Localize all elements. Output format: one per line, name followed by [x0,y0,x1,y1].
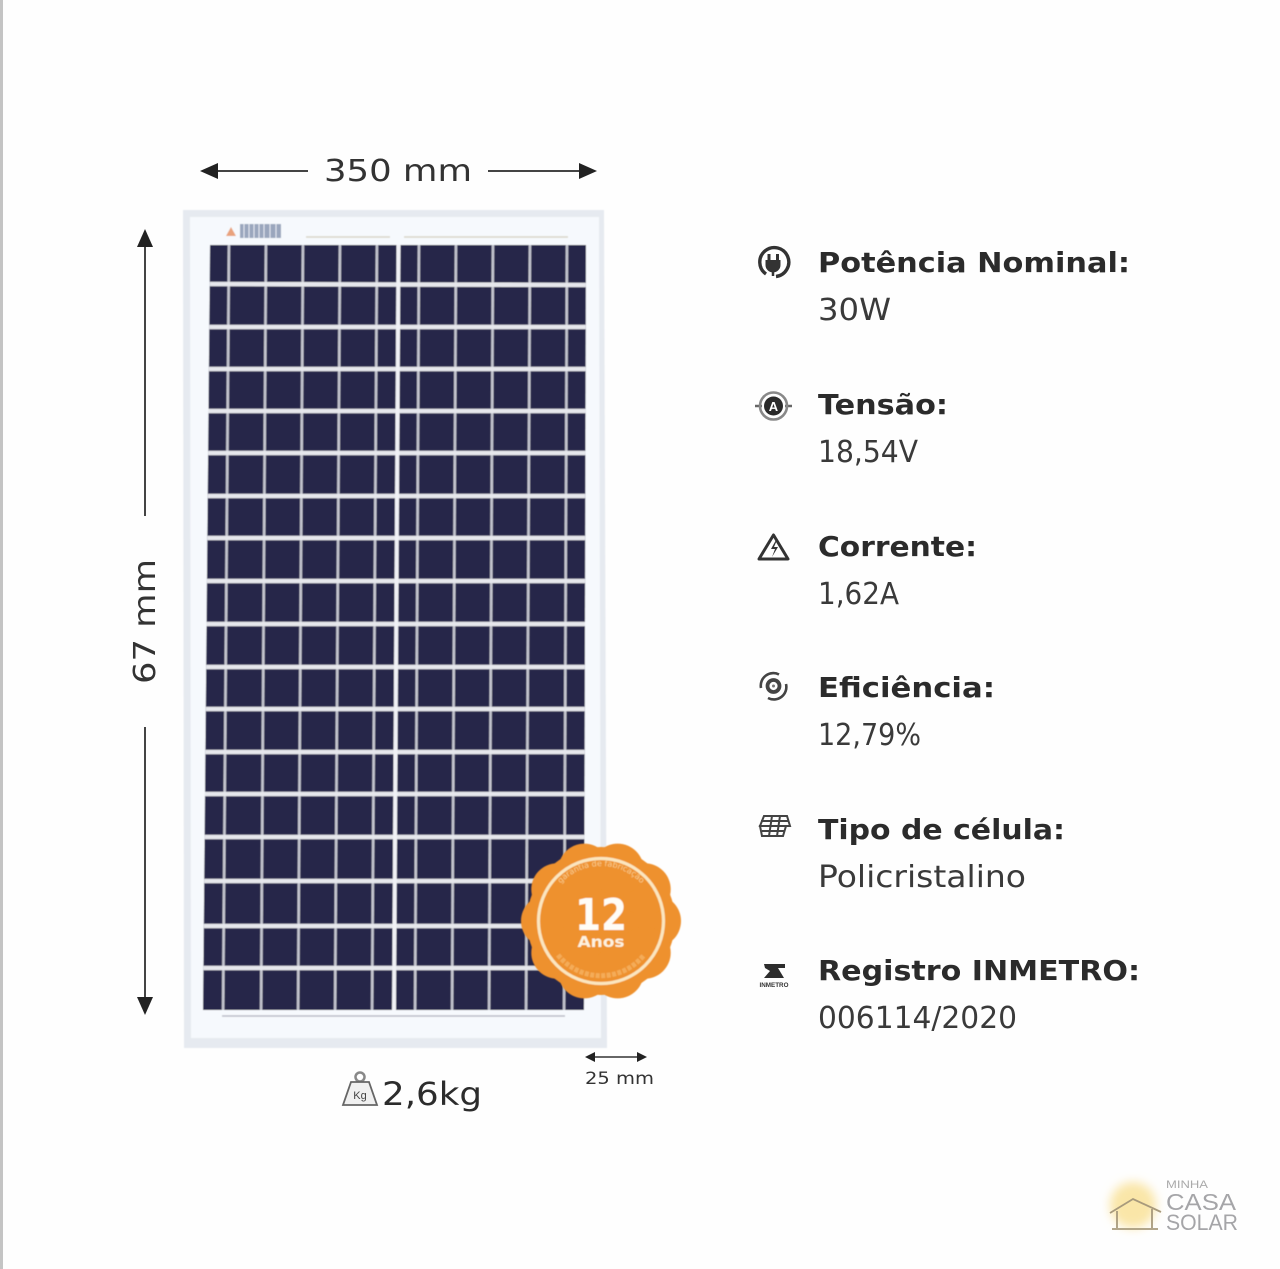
icon: ammeter: A [769,399,779,414]
cell vertical gaps [223,240,567,1018]
spec: eficiência: Eficiência: [818,671,995,704]
warranty badge: 12 anos: 12 [575,890,627,941]
icon: sun and house [1110,1182,1161,1229]
logo: minha casa solar [1110,1179,1238,1235]
icon: ammeter [755,392,792,420]
spec: corrente: 1,62A [818,577,899,612]
spec: tensão: 18,54V [818,435,918,470]
frame width dimension: 25 mm [585,1052,654,1089]
width dimension: 350 mm [200,154,597,189]
warranty badge: 12 anos [520,842,682,1000]
spec: corrente: Corrente: [818,530,977,563]
panel label sticker [226,224,281,238]
spec: potência nominal [760,246,1130,328]
panel frame [183,210,607,1048]
frame width dimension: 25 mm: 25 mm [585,1069,654,1089]
height dimension: 67 mm [128,229,163,1015]
weight: 2,6 kg [343,1072,482,1113]
warranty badge: 12 anos: garantia de fabricação [558,860,644,884]
spec: potência nominal: Potência Nominal: [818,246,1130,279]
spec: registro inmetro: Registro INMETRO: [818,954,1140,987]
spec: eficiência: 12,79% [818,718,921,753]
spec: eficiência [761,671,995,753]
panel cells [203,245,586,1010]
spec: tensão [755,388,948,470]
spec: tipo de célula: Tipo de célula: [818,813,1065,846]
icon: solar cells [760,816,790,836]
icon: inmetro logo: INMETRO [760,983,789,989]
spec: corrente [759,530,977,612]
spec: registro inmetro: 006114/2020 [818,1001,1017,1036]
spec: tipo de célula: Policristalino [818,860,1026,895]
height dimension: 67 mm: 67 mm [128,559,163,684]
icon: electric hazard [759,535,788,559]
logo: minha casa solar: CASA [1166,1189,1237,1215]
cell horizontal gaps [200,284,590,968]
logo: minha casa solar: MINHA [1166,1179,1209,1191]
spec: potência nominal: 30W [818,293,891,328]
logo: minha casa solar: SOLAR [1166,1210,1238,1235]
spec: tensão: Tensão: [818,388,948,421]
weight: 2,6 kg: 2,6kg [382,1075,482,1113]
icon: inmetro logo [760,964,789,989]
icon: plug [760,248,789,276]
icon: weight: Kg [353,1090,367,1102]
width dimension: 350 mm: 350 mm [324,154,472,189]
solar panel [183,210,607,1048]
icon: efficiency gear [761,673,786,699]
spec: registro inmetro [760,954,1140,1036]
spec: tipo de célula [760,813,1065,895]
warranty badge: 12 anos: Anos [578,933,625,951]
